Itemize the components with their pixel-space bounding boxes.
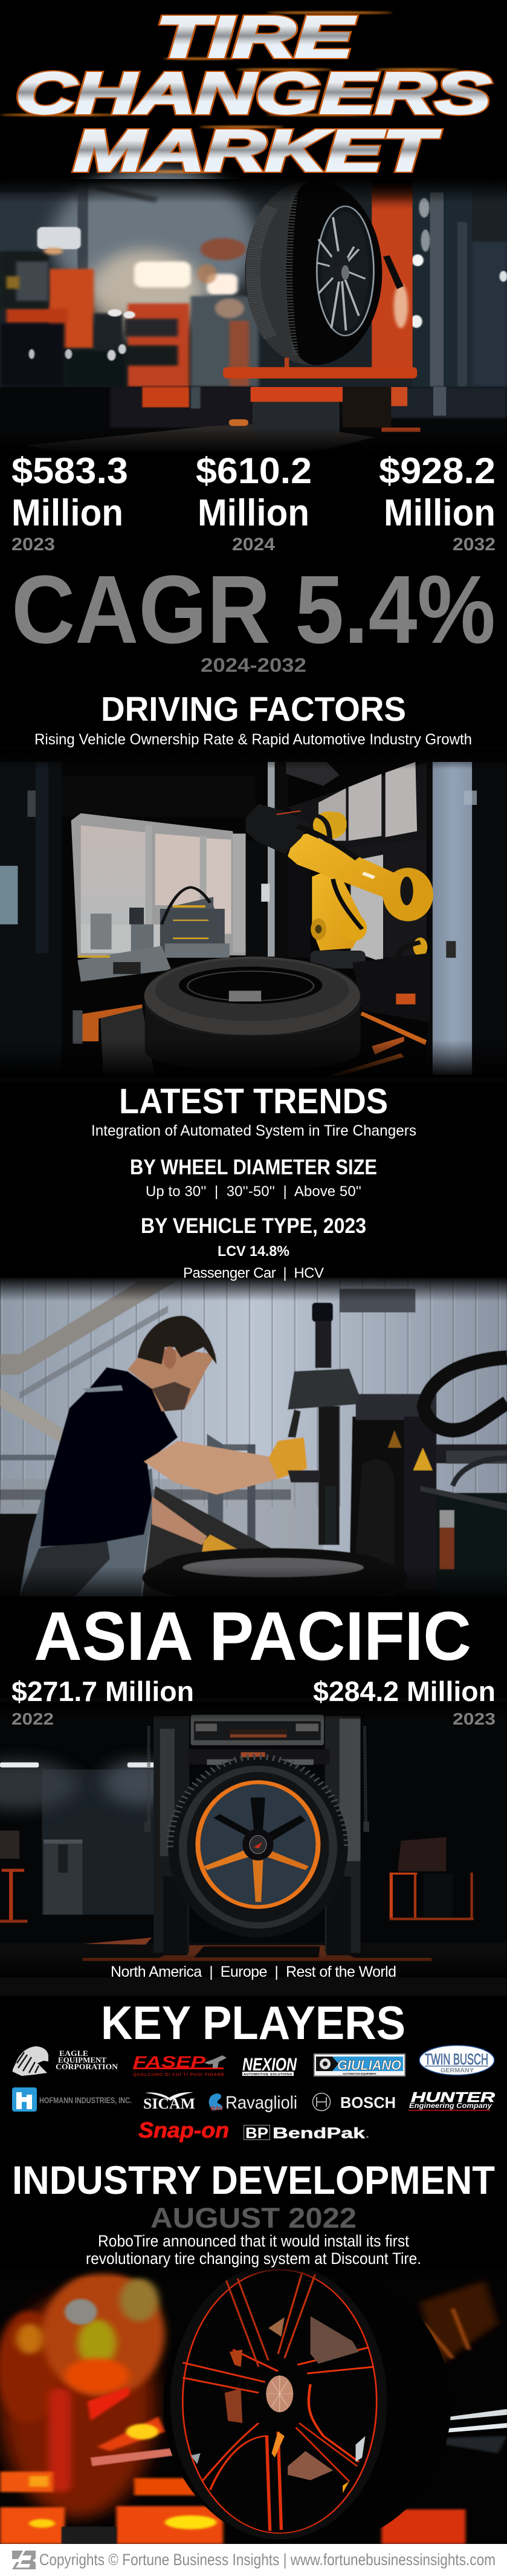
asia pacific stat 2022: 2022: [11, 1709, 54, 1728]
footer copyright: [0, 2544, 507, 2576]
logo: fasep: QUALCUNO DI CUI TI PUOI FIDARE: [133, 2072, 224, 2077]
CAGR figure: 2024-2032: [201, 654, 306, 676]
segment: vehicle type: Passenger Car | HCV: [183, 1265, 324, 1281]
latest trends: [91, 1082, 416, 1139]
logo: hunter: [409, 2089, 496, 2111]
logo: nexion: AUTOMOTIVE SOLUTIONS: [244, 2073, 292, 2077]
logo: sicam: SICAM: [143, 2096, 195, 2112]
logo: fasep: FASEP: [133, 2053, 206, 2071]
market size stats: [11, 450, 496, 555]
logo: bosch: [313, 2093, 396, 2112]
logo: twin busch: [419, 2045, 494, 2075]
asia pacific stat 2022: $271.7 Million: [11, 1676, 194, 1707]
logo: bendpak: BendPak: [273, 2125, 365, 2142]
logo: ravaglioli: RAV: [211, 2106, 223, 2112]
key players heading: KEY PLAYERS: [101, 1996, 405, 2049]
segment: wheel diameter size: BY WHEEL DIAMETER SIZE: [130, 1156, 377, 1179]
photo: robot arm changing a tire: [0, 747, 507, 1082]
logo: bendpak: [244, 2125, 369, 2142]
logo: fasep: [133, 2053, 227, 2077]
title: TIRE: [156, 5, 355, 70]
logo: eagle equipment: CORPORATION: [56, 2062, 118, 2071]
logo: eagle equipment: EAGLE: [59, 2049, 88, 2058]
title: MARKET: [74, 119, 441, 183]
stat 2023: $583.3: [11, 450, 128, 491]
stat 2024: $610.2: [196, 450, 312, 491]
title: CHANGERS: [16, 61, 491, 126]
other regions: North America | Europe | Rest of the World: [111, 1963, 396, 1980]
logo: giuliano: [314, 2054, 405, 2076]
development date: AUGUST 2022: [150, 2202, 357, 2234]
logo: hunter: HUNTER: [411, 2089, 496, 2105]
title: MARKET: [74, 119, 441, 183]
key player logos: [12, 2045, 496, 2142]
stat 2032: Million: [384, 492, 496, 534]
logo: nexion: NEXION: [242, 2055, 297, 2075]
asia pacific stat 2023: $284.2 Million: [313, 1676, 496, 1707]
segment: wheel diameter size: Up to 30'' | 30''-50'' | Above 50'': [146, 1183, 361, 1200]
driving factors: DRIVING FACTORS: [101, 690, 406, 729]
segment: vehicle type: [141, 1214, 366, 1281]
logo: twin busch: GERMANY: [441, 2067, 474, 2074]
logo: eagle equipment: [13, 2046, 118, 2076]
logo: giuliano: GIULIANO: [337, 2057, 401, 2073]
asia pacific stat 2023: 2023: [453, 1709, 496, 1728]
logo: eagle equipment: EQUIPMENT: [58, 2055, 106, 2064]
development description: RoboTire announced that it would install its first: [98, 2232, 409, 2250]
asia pacific stat 2022: [11, 1676, 194, 1728]
stat 2032: $928.2: [379, 450, 496, 491]
stat 2032: [379, 450, 496, 555]
industry development: [12, 2158, 495, 2268]
driving factors: Rising Vehicle Ownership Rate & Rapid Automotive Industry Growth: [34, 731, 472, 748]
photo: blurred workshop with mounted tire: [0, 168, 507, 456]
asia pacific heading: ASIA PACIFIC: [34, 1598, 471, 1675]
logo: snap-on: Snap-on: [138, 2118, 229, 2142]
title flare streaks: [0, 11, 459, 173]
development description: revolutionary tire changing system at Discount Tire.: [86, 2249, 421, 2268]
title: [0, 5, 491, 183]
stat 2024: [196, 450, 312, 555]
latest trends: LATEST TRENDS: [119, 1082, 388, 1121]
photo: wheel with red glow: [0, 2263, 507, 2548]
segment: wheel diameter size: [130, 1156, 377, 1200]
photo: mechanic using tire changer: [0, 1276, 507, 1608]
logo: ravaglioli: Ravaglioli: [225, 2093, 297, 2113]
asia pacific stat 2023: [313, 1676, 496, 1728]
stat 2024: Million: [198, 492, 309, 534]
title: CHANGERS: [16, 61, 491, 126]
logo: bendpak: BP: [245, 2125, 268, 2142]
development description: [86, 2232, 421, 2268]
stat 2023: Million: [11, 492, 123, 534]
photo: tire with orange rim in dark shop: [0, 1698, 507, 1996]
stat 2024: 2024: [232, 535, 275, 555]
stat 2023: 2023: [11, 535, 55, 555]
stat 2032: 2032: [453, 535, 496, 555]
driving factors: [34, 690, 472, 748]
logo: giuliano: AUTOMOTIVE EQUIPMENT: [343, 2072, 376, 2075]
logo: hofmann: HOFMANN INDUSTRIES, INC.: [39, 2095, 132, 2105]
logo: hofmann: [12, 2087, 132, 2112]
logo: bosch: BOSCH: [340, 2093, 396, 2112]
segment: vehicle type: LCV 14.8%: [218, 1243, 289, 1260]
latest trends: Integration of Automated System in Tire Changers: [91, 1122, 416, 1139]
icon: fortune business insights logo: [12, 2551, 36, 2569]
title: TIRE: [156, 5, 355, 70]
stat 2023: [11, 450, 128, 555]
segment: vehicle type: BY VEHICLE TYPE, 2023: [141, 1214, 366, 1238]
logo: hunter: Engineering Company: [409, 2101, 492, 2110]
